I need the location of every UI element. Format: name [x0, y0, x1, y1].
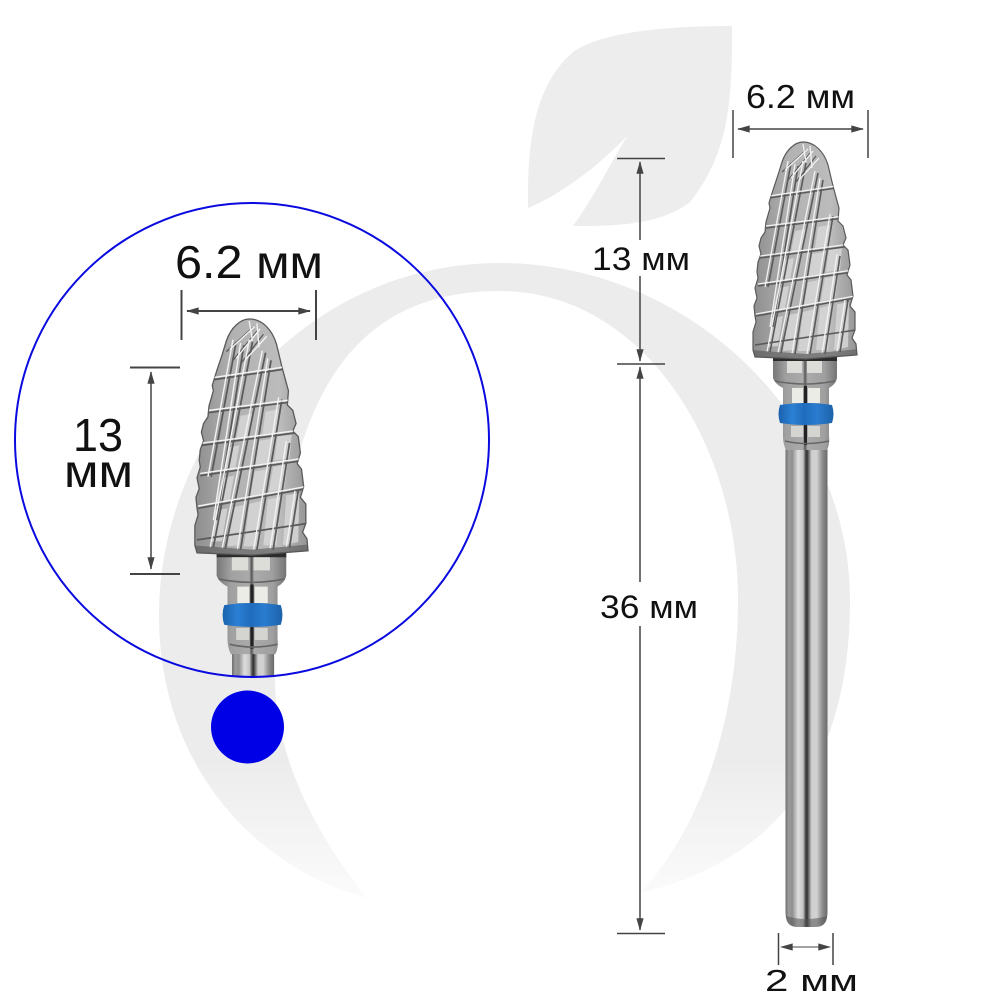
right head length label: 13 мм: [592, 241, 690, 277]
right shank length dimension: [617, 367, 665, 934]
left shank: [232, 650, 274, 677]
blue grit dot: [211, 690, 284, 764]
right top width label: 6.2 мм: [746, 78, 855, 115]
left length dimension: [130, 368, 180, 574]
right head length dimension: [617, 158, 665, 364]
watermark logo: leaf and crescent: [159, 26, 850, 898]
shank diameter dimension: [778, 933, 833, 965]
left length label: 13: [73, 409, 123, 461]
right shank length label: 36 мм: [600, 589, 698, 625]
left width dimension: [182, 290, 316, 340]
left drill: [192, 319, 311, 677]
left head and neck: [192, 319, 311, 654]
shank diameter label: 2 мм: [765, 963, 858, 998]
right head and neck: [750, 142, 860, 450]
left length label: мм: [64, 445, 133, 497]
left length label: [64, 409, 133, 497]
right top width dimension: [733, 110, 868, 158]
watermark crescent: [159, 263, 850, 898]
left width label: 6.2 мм: [175, 236, 323, 288]
blue circle outline: [15, 203, 489, 677]
right drill: [750, 142, 860, 927]
right shank: [786, 440, 828, 927]
watermark leaf: [528, 26, 732, 226]
